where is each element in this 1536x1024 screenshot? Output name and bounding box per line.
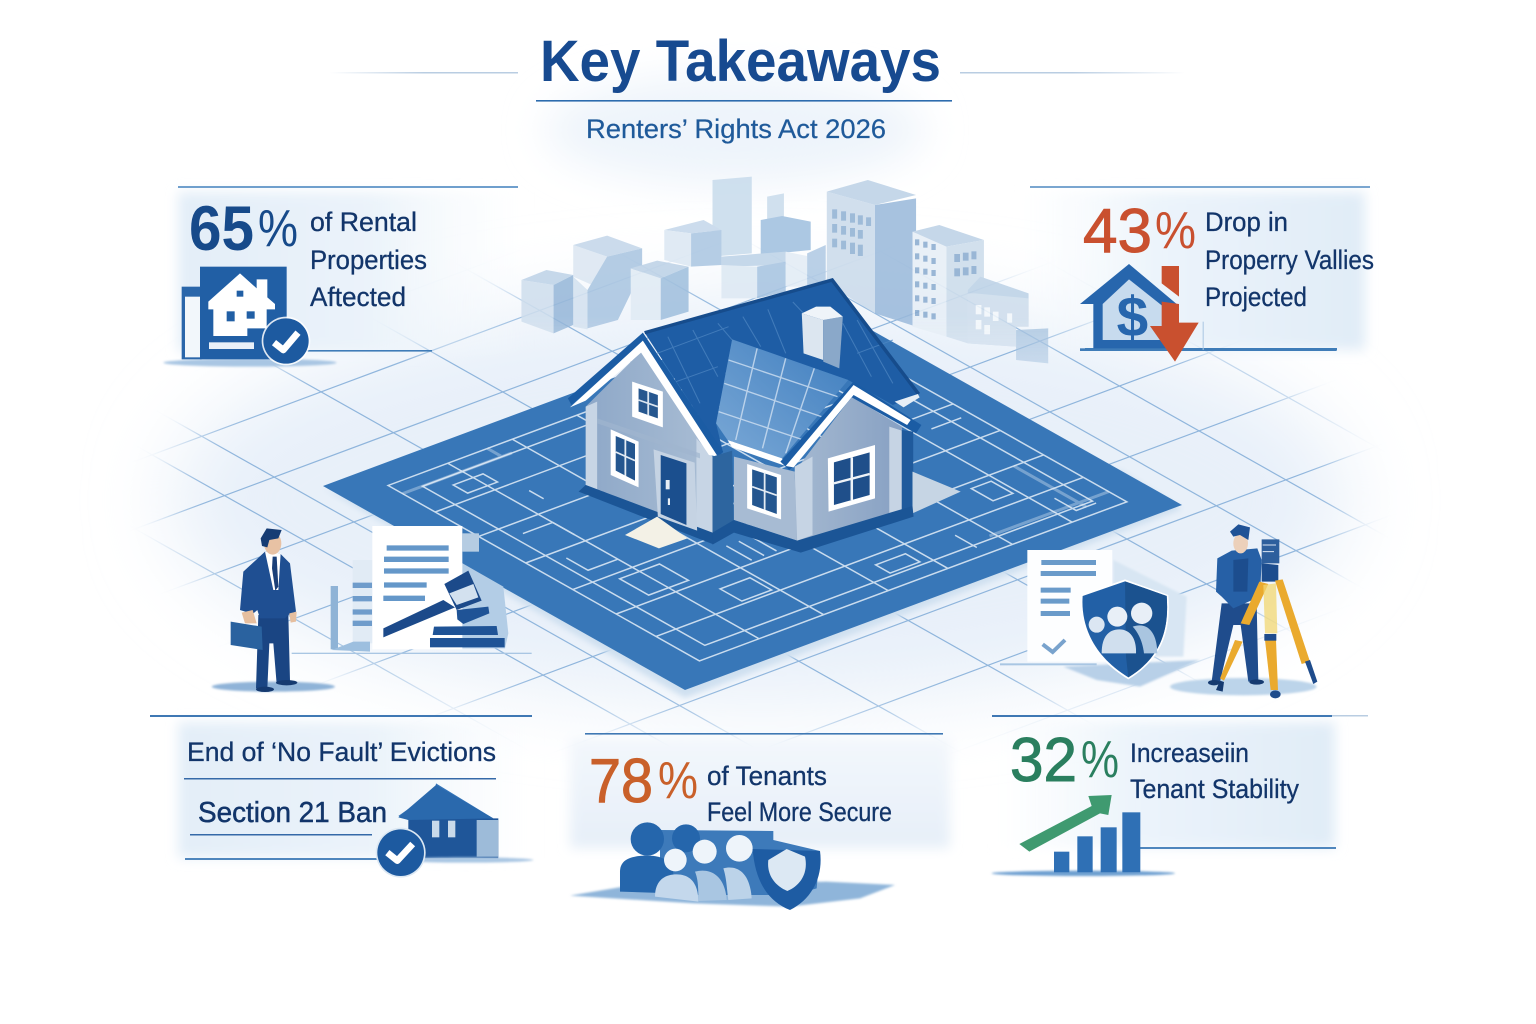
stat: 43% drop in property values: Drop in (1205, 207, 1288, 237)
stat: 32% increase in tenant stability (1010, 726, 1299, 804)
left gable trim (568, 333, 723, 458)
panel: 78% background (570, 733, 950, 848)
stat: 65% of rental properties affected: % (258, 200, 298, 258)
icon: tenant family with shield (570, 822, 895, 910)
icon: house value with falling arrow: $ (1117, 287, 1148, 350)
main roof (645, 280, 920, 453)
icon: document and gavel (292, 526, 532, 654)
stat: 32% increase in tenant stability: Tenant Stability (1130, 774, 1299, 804)
stat: 32% increase in tenant stability: % (1081, 731, 1119, 789)
stat: 78% of tenants feel more secure (589, 747, 892, 827)
central house (568, 280, 961, 553)
stat: end of no fault evictions (187, 737, 496, 829)
stat: 78% of tenants feel more secure: % (658, 752, 698, 810)
stat: end of no fault evictions: Section 21 Ban (198, 797, 387, 829)
front door (654, 449, 697, 531)
icon: house value with falling arrow (1080, 264, 1337, 362)
title: Key Takeaways (540, 29, 941, 94)
city skyline (521, 177, 1048, 363)
lower window (611, 429, 639, 487)
stat: 65% of rental properties affected: of Rental (310, 207, 417, 237)
stat: 32% increase in tenant stability: Increaseiin (1130, 738, 1249, 768)
panel: 32% background (990, 715, 1368, 849)
figure: businessman with briefcase (212, 528, 335, 692)
stat: 65% of rental properties affected (189, 194, 427, 312)
icon: document and family shield (1000, 550, 1200, 687)
chimney (802, 307, 843, 368)
right wing wall (712, 397, 961, 553)
stat: 65% of rental properties affected: Properties (310, 245, 427, 275)
stat: 78% of tenants feel more secure: 78 (589, 747, 653, 816)
stat: 43% drop in property values: 43 (1083, 197, 1152, 266)
panel: Section 21 background (150, 715, 538, 860)
icon: growth chart with arrow (992, 795, 1175, 876)
figure: surveyor with tripod (1170, 524, 1317, 698)
subtitle: Renters’ Rights Act 2026 (586, 114, 886, 144)
stat: 78% of tenants feel more secure: of Tenants (707, 761, 827, 791)
panel: 43% background (1015, 186, 1370, 350)
stat: 43% drop in property values: Projected (1205, 282, 1307, 312)
upper window (632, 382, 663, 427)
centre wall (712, 451, 797, 544)
entry step (625, 517, 687, 548)
panel: 65% background (178, 186, 528, 352)
icon: cottage with check (376, 783, 533, 878)
stat: 65% of rental properties affected: Aftected (310, 282, 406, 312)
left wall (579, 352, 712, 544)
front dormer roof (716, 339, 848, 466)
stat: 32% increase in tenant stability: 32 (1010, 726, 1077, 795)
right gable trim (780, 382, 921, 470)
ground wash (170, 75, 1350, 705)
stat: 43% drop in property values: % (1155, 202, 1196, 260)
stat: 43% drop in property values: Properry Vallies (1205, 245, 1374, 275)
stat: 65% of rental properties affected: 65 (189, 194, 254, 264)
stat: end of no fault evictions: End of ‘No Fault’ Evictions (187, 737, 496, 767)
icon: house with check (163, 267, 337, 367)
ground grid (147, 248, 1374, 740)
stat: 43% drop in property values (1083, 197, 1374, 312)
stat: 78% of tenants feel more secure: Feel More Secure (707, 797, 892, 827)
blueprint sheet (323, 301, 1182, 698)
